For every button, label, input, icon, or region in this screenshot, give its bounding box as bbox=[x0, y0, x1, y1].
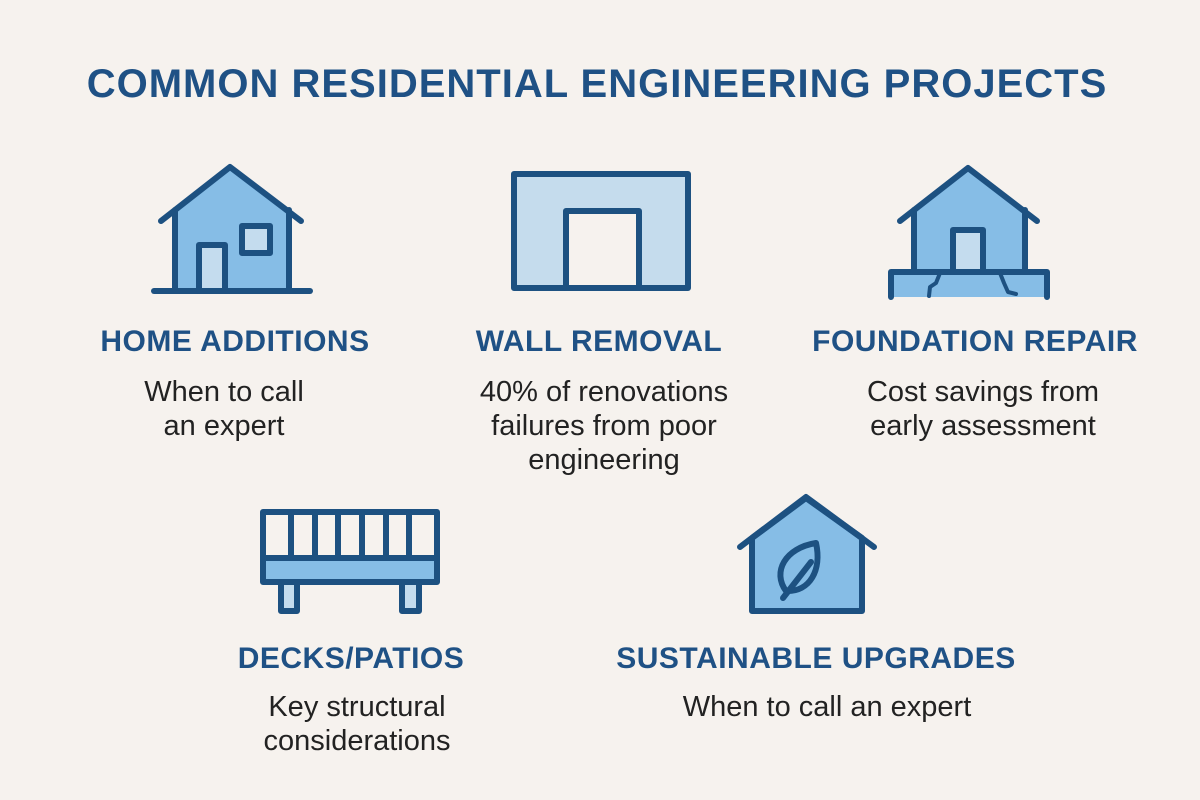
text: decks/patios: considerations bbox=[264, 725, 450, 757]
heading: decks/patios: DECKS/PATIOS bbox=[238, 642, 464, 675]
text: wall removal: 40% of renovations bbox=[480, 376, 728, 408]
text: foundation repair: Cost savings from bbox=[867, 376, 1099, 408]
title: COMMON RESIDENTIAL ENGINEERING PROJECTS bbox=[87, 62, 1107, 106]
heading: foundation repair: FOUNDATION REPAIR bbox=[812, 325, 1138, 358]
icon: house bbox=[154, 167, 310, 291]
text: wall removal: failures from poor bbox=[491, 410, 717, 442]
icon: wall bbox=[514, 174, 688, 288]
icon: sustainable house bbox=[740, 497, 874, 611]
heading: wall removal: WALL REMOVAL bbox=[476, 325, 722, 358]
heading: home additions: HOME ADDITIONS bbox=[100, 325, 370, 358]
text: wall removal bbox=[480, 376, 728, 476]
heading: sustainable upgrades: SUSTAINABLE UPGRADES bbox=[616, 642, 1016, 675]
text: decks/patios bbox=[264, 691, 450, 757]
text: foundation repair: early assessment bbox=[870, 410, 1096, 442]
icon: deck bbox=[263, 512, 437, 611]
text: home additions: an expert bbox=[164, 410, 284, 442]
text: home additions: When to call bbox=[144, 376, 304, 408]
text: home additions bbox=[144, 376, 304, 442]
icon: foundation house bbox=[891, 168, 1047, 297]
text: foundation repair bbox=[867, 376, 1099, 442]
text: decks/patios: Key structural bbox=[268, 691, 446, 723]
text: sustainable upgrades: When to call an expert bbox=[683, 691, 971, 723]
text: wall removal: engineering bbox=[528, 444, 680, 476]
